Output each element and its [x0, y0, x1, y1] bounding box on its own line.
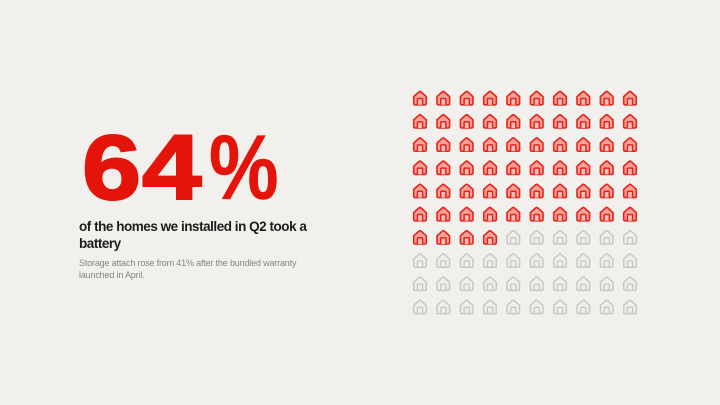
supporting text: launched in April. [79, 270, 144, 280]
supporting text [79, 258, 296, 280]
big statistic: 64%: 6 [82, 117, 141, 219]
big statistic: 64%: 4 [142, 117, 202, 219]
headline text [79, 219, 307, 251]
supporting text: Storage attach rose from 41% after the bundled warranty [79, 258, 296, 268]
highlighted homes (64) [414, 92, 636, 244]
big statistic: 64% [82, 117, 278, 219]
remaining homes (36) [414, 231, 636, 314]
headline text: of the homes we installed in Q2 took a [79, 219, 306, 234]
headline text: battery [79, 236, 121, 251]
big statistic: 64%: % [208, 117, 278, 219]
